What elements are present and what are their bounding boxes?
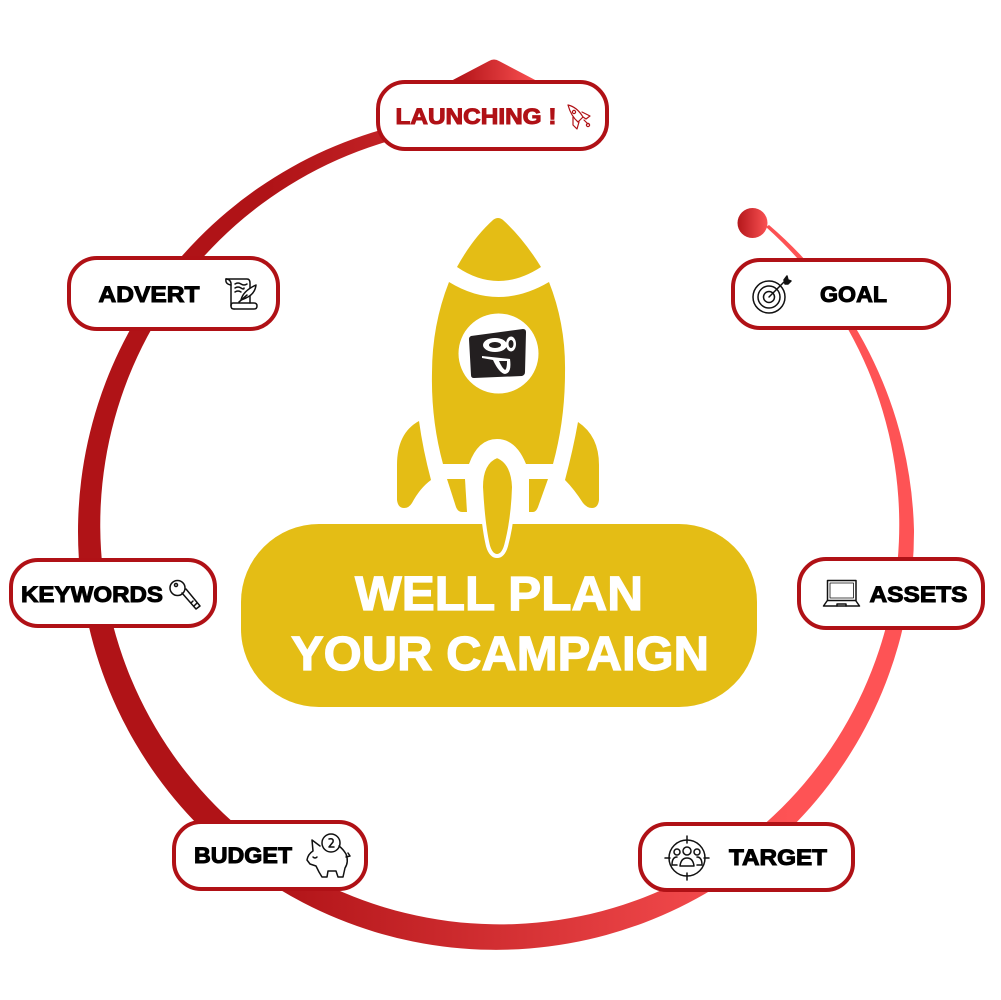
budget label: BUDGET [194,843,292,868]
rocket body [432,282,565,464]
icon: scroll and quill [226,279,257,309]
assets label: ASSETS [870,582,968,607]
lower body left [447,479,467,512]
assets pill [799,559,983,628]
start dot [738,208,768,238]
step: goal [733,260,949,328]
title panel [241,524,757,707]
icon: audience crosshair [665,836,709,880]
arrowhead at ring top [449,60,539,82]
keywords label: KEYWORDS [21,582,163,607]
launching pill [378,82,607,149]
circular progress ring [78,125,914,950]
target pill [640,824,853,890]
launching label: LAUNCHING ! [396,104,556,129]
icon: piggy bank [307,834,350,877]
nose cone [457,218,541,281]
lower body right [529,479,548,512]
icon: key [170,580,200,609]
rocket exhaust flame [481,456,514,556]
step: target [640,824,853,890]
step: advert [69,258,278,329]
step: assets [799,559,983,628]
title [291,568,709,681]
icon: laptop [824,580,860,606]
left fin [397,421,431,508]
right fin [565,422,599,508]
step: budget [174,822,366,889]
step: launching [378,82,607,149]
porthole [458,314,538,394]
logo [469,329,526,378]
goal pill [733,260,949,328]
advert pill [69,258,278,329]
central rocket illustration [397,218,599,512]
icon: target with arrow [753,276,791,313]
budget pill [174,822,366,889]
title line 1: WELL PLAN [355,568,643,621]
step: keywords [11,560,215,626]
target label: TARGET [729,845,827,870]
advert label: ADVERT [98,282,200,307]
goal label: GOAL [820,282,887,307]
keywords pill [11,560,215,626]
title line 2: YOUR CAMPAIGN [291,628,709,681]
icon: rocket [568,105,590,129]
